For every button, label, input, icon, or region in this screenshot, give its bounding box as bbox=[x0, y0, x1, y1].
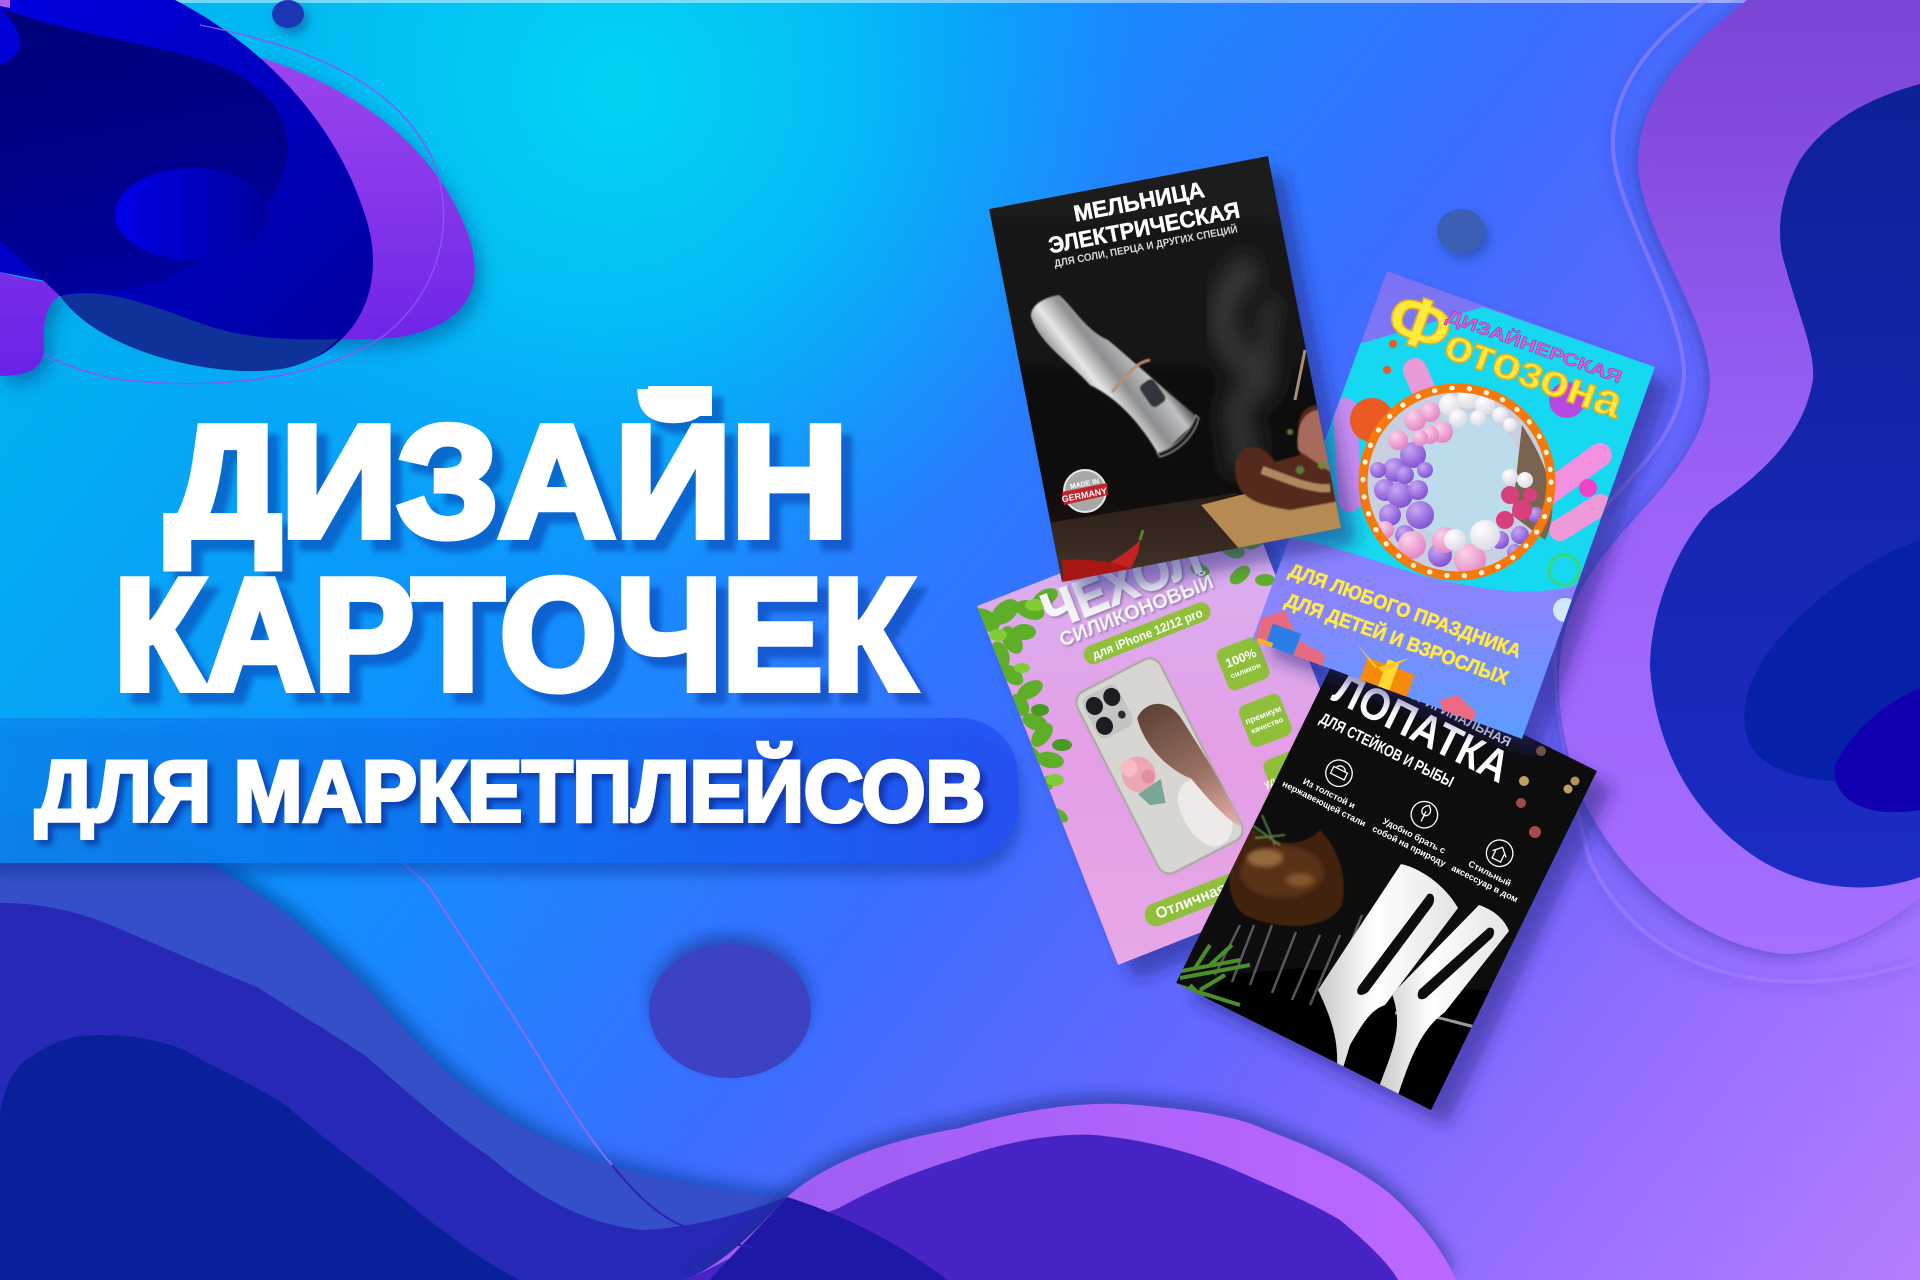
spatula card text: Стильный bbox=[1467, 859, 1513, 888]
small blob top bbox=[272, 0, 304, 28]
bottom fluid waves bbox=[0, 814, 1456, 1280]
case heading: ЧЕХОЛ bbox=[1034, 527, 1210, 642]
table bbox=[1050, 493, 1341, 582]
spatula card text: нержавеющей стали bbox=[1281, 779, 1367, 829]
right fluid blob bbox=[1555, 0, 1920, 982]
spatula card text: ОРИГИНАЛЬНАЯ bbox=[1406, 686, 1514, 750]
case badges: удобство bbox=[1262, 761, 1313, 791]
smoke bbox=[1222, 265, 1275, 470]
spatula heads bbox=[1318, 864, 1509, 1095]
title: дизайн карточек bbox=[114, 386, 915, 723]
decorative pills bbox=[1345, 370, 1600, 530]
pan bbox=[1208, 968, 1490, 1110]
case badges bbox=[1084, 602, 1292, 926]
title: дизайн карточек: ДИЗАЙН bbox=[166, 393, 848, 570]
phone bbox=[1072, 654, 1247, 878]
subtitle bar bbox=[0, 718, 1018, 863]
mill heading: ЭЛЕКТРИЧЕСКАЯ bbox=[1046, 197, 1242, 258]
photo zone text: ДЛЯ ЛЮБОГО ПРАЗДНИКА bbox=[1286, 560, 1524, 663]
photo zone text: Фотозона bbox=[1377, 275, 1638, 433]
small blob right of centre bbox=[1437, 209, 1485, 253]
chili bbox=[1062, 530, 1144, 582]
mill heading: МЕЛЬНИЦА bbox=[1071, 176, 1207, 227]
card: electric mill bbox=[989, 156, 1345, 595]
card: spatula bbox=[1176, 644, 1597, 1120]
meat on board bbox=[1201, 350, 1345, 552]
gifts bbox=[1253, 610, 1476, 730]
badge: made in germany: GERMANY bbox=[1061, 486, 1108, 504]
case badges: силикон bbox=[1229, 660, 1262, 681]
peppercorns bbox=[1516, 746, 1580, 838]
mill heading bbox=[1048, 182, 1240, 270]
spatula card text: собой на природу bbox=[1371, 823, 1447, 868]
case badges: 100% bbox=[1223, 646, 1258, 671]
leaves bbox=[966, 527, 1275, 826]
spatula card text: аксессуар в дом bbox=[1450, 863, 1520, 905]
case badges: премиум bbox=[1244, 703, 1283, 727]
case badges: Отличная bbox=[1153, 880, 1229, 923]
grinder bbox=[1031, 295, 1199, 457]
rosemary bbox=[1176, 945, 1250, 1005]
case badges: для iPhone 12/12 pro bbox=[1090, 606, 1205, 662]
spatula card text bbox=[1282, 675, 1518, 902]
centre oval blob bbox=[649, 944, 811, 1078]
top-left fluid blob bbox=[0, 0, 475, 384]
photo zone text: ДЛЯ ДЕТЕЙ И ВЗРОСЛЫХ bbox=[1282, 587, 1512, 690]
mill heading: ДЛЯ СОЛИ, ПЕРЦА И ДРУГИХ СПЕЦИЙ bbox=[1053, 222, 1239, 270]
photo zone text: ДИЗАЙНЕРСКАЯ bbox=[1444, 306, 1625, 387]
spatula card text: Удобно брать с bbox=[1381, 816, 1447, 856]
case heading: СИЛИКОНОВЫЙ bbox=[1056, 569, 1217, 652]
card: photo zone bbox=[1252, 271, 1655, 739]
card: phone case bbox=[977, 540, 1329, 986]
title: дизайн карточек: КАРТОЧЕК bbox=[114, 547, 915, 723]
decorative balloons bbox=[1350, 340, 1597, 622]
spatula card text: Из толстой и bbox=[1301, 776, 1357, 811]
badge: made in germany bbox=[1061, 470, 1108, 512]
case badges: качество bbox=[1250, 715, 1285, 736]
photo zone text bbox=[1282, 296, 1622, 686]
grill bars bbox=[1215, 915, 1362, 1005]
spatula card text: ДЛЯ СТЕЙКОВ И РЫБЫ bbox=[1317, 709, 1457, 791]
subtitle: для маркетплейсов: ДЛЯ МАРКЕТПЛЕЙСОВ bbox=[35, 743, 985, 840]
cyan wave bbox=[1281, 307, 1655, 592]
badge: made in germany: MADE IN bbox=[1070, 478, 1100, 491]
balloon wreath bbox=[1359, 384, 1555, 580]
spatula card text: ЛОПАТКА bbox=[1325, 662, 1518, 793]
steak bbox=[1229, 815, 1344, 926]
